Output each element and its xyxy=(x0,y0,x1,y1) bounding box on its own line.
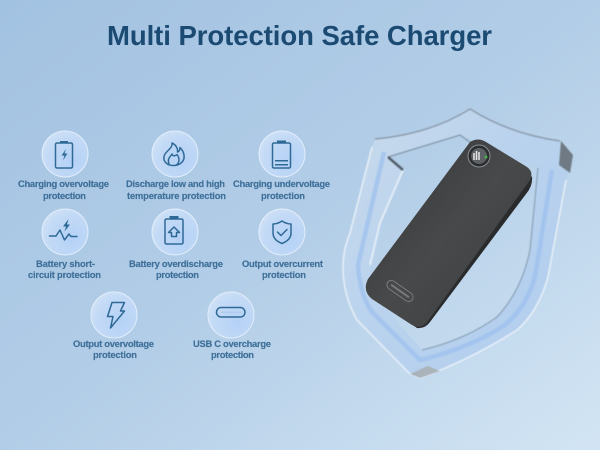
label: battery overdischarge: protection xyxy=(156,269,199,280)
power bank side xyxy=(372,176,532,328)
label: USB C overcharge xyxy=(193,338,271,360)
title: Multi Protection Safe Charger xyxy=(107,20,492,51)
shield glass band xyxy=(343,109,573,378)
label: output overcurrent: protection xyxy=(262,269,306,280)
label: charging undervoltage: Charging undervoltage xyxy=(233,178,330,189)
label: discharge temperature: Discharge low and high xyxy=(126,178,225,189)
icon: output overvoltage bolt xyxy=(91,292,137,338)
label: output overvoltage: protection xyxy=(93,349,137,360)
icon: output overcurrent shield xyxy=(259,209,305,255)
label: output overcurrent xyxy=(242,258,323,280)
icon: battery overdischarge xyxy=(152,209,198,255)
label: charging overvoltage: Charging overvoltage xyxy=(18,178,109,189)
label: output overcurrent: Output overcurrent xyxy=(242,258,323,269)
label: discharge temperature: temperature protection xyxy=(127,190,226,201)
label: battery overdischarge: Battery overdischarge xyxy=(129,258,223,269)
label: battery overdischarge xyxy=(129,258,223,280)
label: charging undervoltage: protection xyxy=(261,190,305,201)
icon: charging undervoltage xyxy=(259,131,305,177)
label: USB C overcharge: protection xyxy=(211,349,254,360)
label: battery short circuit: Battery short- xyxy=(36,258,95,269)
label: battery short circuit: circuit protection xyxy=(28,269,101,280)
icon: discharge temperature xyxy=(152,131,198,177)
label: charging overvoltage xyxy=(18,178,109,201)
shield xyxy=(343,109,573,378)
power bank body xyxy=(366,140,531,327)
icon: USB C xyxy=(208,292,254,338)
label: USB C overcharge: USB C overcharge xyxy=(193,338,271,349)
label: charging undervoltage xyxy=(233,178,330,201)
label: output overvoltage xyxy=(73,338,154,360)
label: battery short circuit xyxy=(28,258,101,280)
icon: charging overvoltage xyxy=(42,131,88,177)
label: discharge temperature xyxy=(126,178,226,201)
power bank display xyxy=(468,145,490,167)
label: charging overvoltage: protection xyxy=(43,190,86,201)
power bank logo plate xyxy=(385,279,415,303)
icon: battery short circuit xyxy=(42,209,88,255)
power bank xyxy=(366,140,532,328)
shield highlights xyxy=(343,147,566,378)
label: output overvoltage: Output overvoltage xyxy=(73,338,154,349)
